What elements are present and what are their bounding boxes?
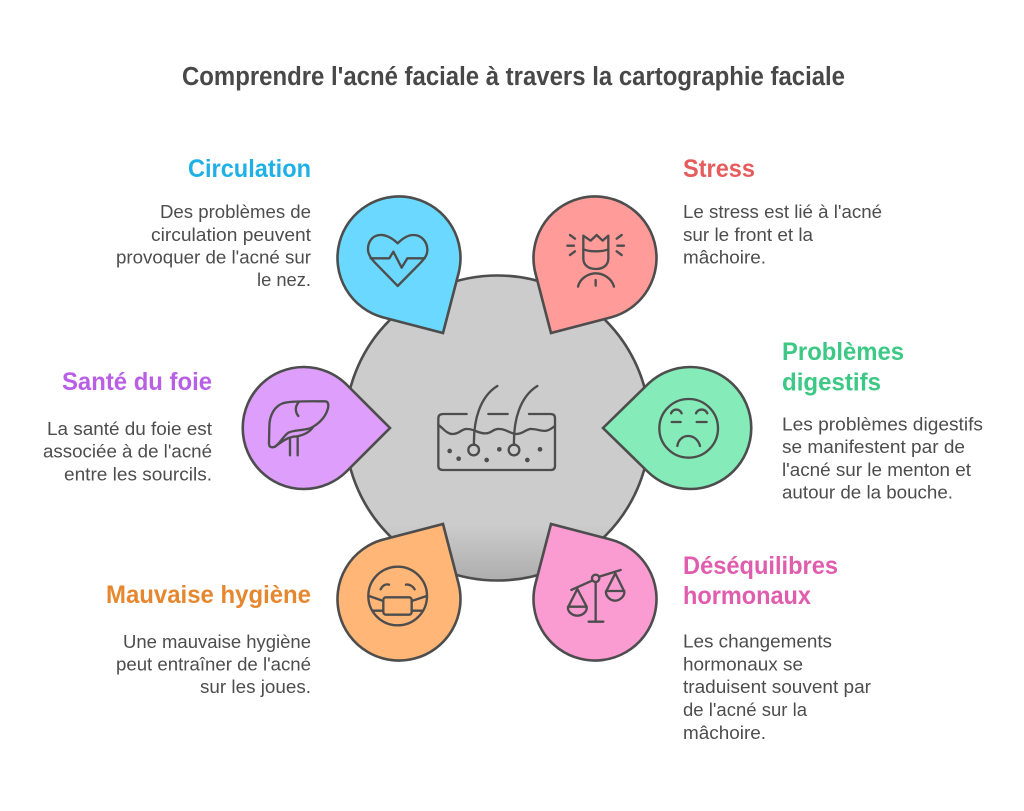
pin: orange [337, 524, 460, 661]
heading: Santé du foie: Santé du foie [62, 368, 212, 396]
text: déséquilibres hormonaux description: de l'acné sur la [683, 700, 808, 720]
panel: mauvaise hygiène [106, 524, 460, 697]
icon: heart with pulse [368, 235, 427, 286]
pin: pink [534, 524, 657, 661]
text: circulation description [116, 202, 311, 290]
text: circulation description: provoquer de l'acné sur [116, 248, 311, 268]
panel: stress [534, 155, 882, 333]
text: problèmes digestifs description: autour de la bouche. [782, 482, 953, 502]
text: déséquilibres hormonaux description: mâchoire. [683, 723, 766, 743]
text: mauvaise hygiène description [116, 632, 311, 697]
heading: Problèmes digestifs [782, 338, 904, 396]
text: déséquilibres hormonaux description [683, 632, 871, 743]
heading: Mauvaise hygiène: Mauvaise hygiène [106, 581, 311, 609]
pin: green [603, 367, 751, 489]
text: santé du foie description [43, 419, 212, 484]
central circle with skin icon [345, 276, 650, 580]
text: circulation description: Des problèmes de [160, 202, 311, 222]
text: santé du foie description: associée à de l'acné [43, 442, 212, 462]
text: problèmes digestifs description: se manifestent par de [782, 437, 965, 457]
text: stress description: mâchoire. [683, 248, 766, 268]
central circle [345, 276, 650, 580]
heading: Problèmes digestifs: Problèmes [782, 338, 904, 366]
pin: blue [337, 196, 460, 333]
icon: skin cross-section with hair follicles [438, 386, 555, 470]
text: déséquilibres hormonaux description: Les changements [683, 632, 832, 652]
text: stress description [683, 202, 882, 268]
text: circulation description: circulation peuvent [151, 225, 311, 245]
panel: problèmes digestifs [603, 338, 983, 502]
pin: red [534, 196, 657, 333]
pin: purple [243, 367, 390, 489]
heading: Stress: Stress [683, 155, 755, 183]
text: stress description: sur le front et la [683, 225, 814, 245]
text: santé du foie description: entre les sourcils. [64, 464, 212, 484]
panel: circulation [116, 155, 460, 333]
text: mauvaise hygiène description: Une mauvaise hygiène [123, 632, 311, 652]
text: mauvaise hygiène description: sur les joues. [200, 677, 311, 697]
icon: liver [269, 401, 328, 455]
heading: Déséquilibres hormonaux: hormonaux [683, 582, 811, 610]
text: déséquilibres hormonaux description: hormonaux se [683, 654, 803, 674]
text: santé du foie description: La santé du foie est [47, 419, 212, 439]
title: Comprendre l'acné faciale à travers la cartographie faciale [182, 63, 845, 91]
icon: unhappy face [659, 399, 718, 458]
text: stress description: Le stress est lié à l'acné [683, 202, 882, 222]
text: problèmes digestifs description: l'acné sur le menton et [782, 460, 971, 480]
icon: stressed person [567, 235, 624, 287]
panel: santé du foie [43, 367, 390, 489]
icon: face with mask [368, 567, 427, 625]
text: problèmes digestifs description [782, 414, 983, 502]
text: problèmes digestifs description: Les problèmes digestifs [782, 414, 983, 434]
text: déséquilibres hormonaux description: traduisent souvent par [683, 677, 871, 697]
heading: Circulation: Circulation [188, 155, 311, 183]
icon: balance scale [568, 570, 624, 622]
heading: Déséquilibres hormonaux [683, 552, 838, 610]
heading: Problèmes digestifs: digestifs [782, 368, 881, 396]
text: circulation description: le nez. [257, 270, 311, 290]
text: mauvaise hygiène description: peut entraîner de l'acné [116, 654, 311, 674]
heading: Déséquilibres hormonaux: Déséquilibres [683, 552, 838, 580]
panel: déséquilibres hormonaux [534, 524, 871, 743]
